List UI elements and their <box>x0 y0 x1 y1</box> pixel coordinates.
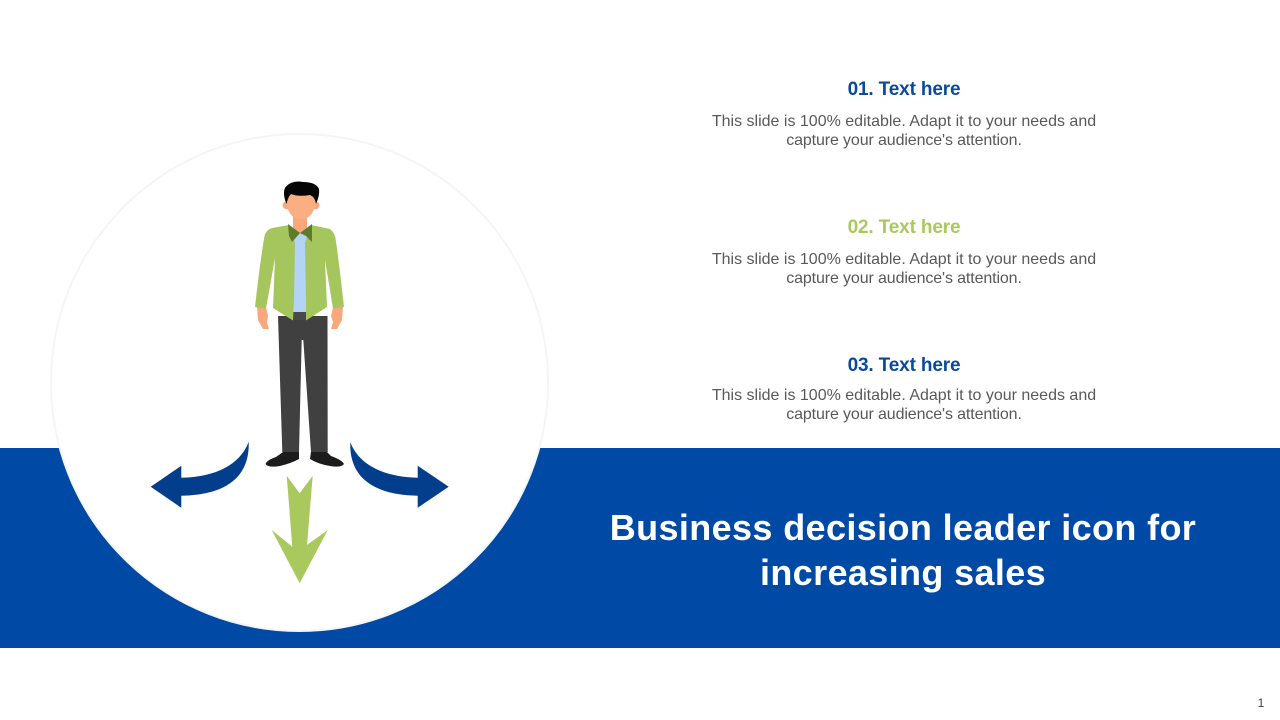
belt <box>293 312 306 320</box>
title: Business decision leader icon for <box>610 507 1196 548</box>
blue banner <box>0 448 1280 648</box>
icon: businessman <box>255 182 344 467</box>
shirt <box>293 233 307 315</box>
arrow: right <box>350 442 449 508</box>
hair <box>284 182 319 204</box>
body 03 <box>712 387 1096 423</box>
jacket <box>255 225 344 320</box>
ears <box>283 201 319 209</box>
face <box>286 194 316 219</box>
hands <box>257 307 343 329</box>
right shoe <box>310 452 344 467</box>
text block 01 <box>712 79 1096 149</box>
text block 03 <box>712 355 1096 423</box>
heading 03: 03. Text here <box>848 355 960 376</box>
page number: 1 <box>1258 696 1264 710</box>
trousers <box>278 316 328 452</box>
body 03: This slide is 100% editable. Adapt it to your needs and <box>712 387 1096 404</box>
body 03: capture your audience's attention. <box>786 406 1022 423</box>
heading 01: 01. Text here <box>848 79 960 100</box>
body 01: capture your audience's attention. <box>786 132 1022 149</box>
title: increasing sales <box>760 552 1046 593</box>
arrow: down <box>272 476 328 583</box>
body 01: This slide is 100% editable. Adapt it to your needs and <box>712 113 1096 130</box>
body 02 <box>712 251 1096 287</box>
heading 02: 02. Text here <box>848 217 960 238</box>
title <box>610 507 1196 593</box>
body 02: capture your audience's attention. <box>786 270 1022 287</box>
neck <box>293 212 307 234</box>
arrow: left <box>151 442 249 508</box>
body 01 <box>712 113 1096 149</box>
text block 02 <box>712 217 1096 287</box>
body 02: This slide is 100% editable. Adapt it to your needs and <box>712 251 1096 268</box>
left shoe <box>266 452 299 467</box>
collar <box>288 224 312 242</box>
white circle <box>51 134 548 631</box>
